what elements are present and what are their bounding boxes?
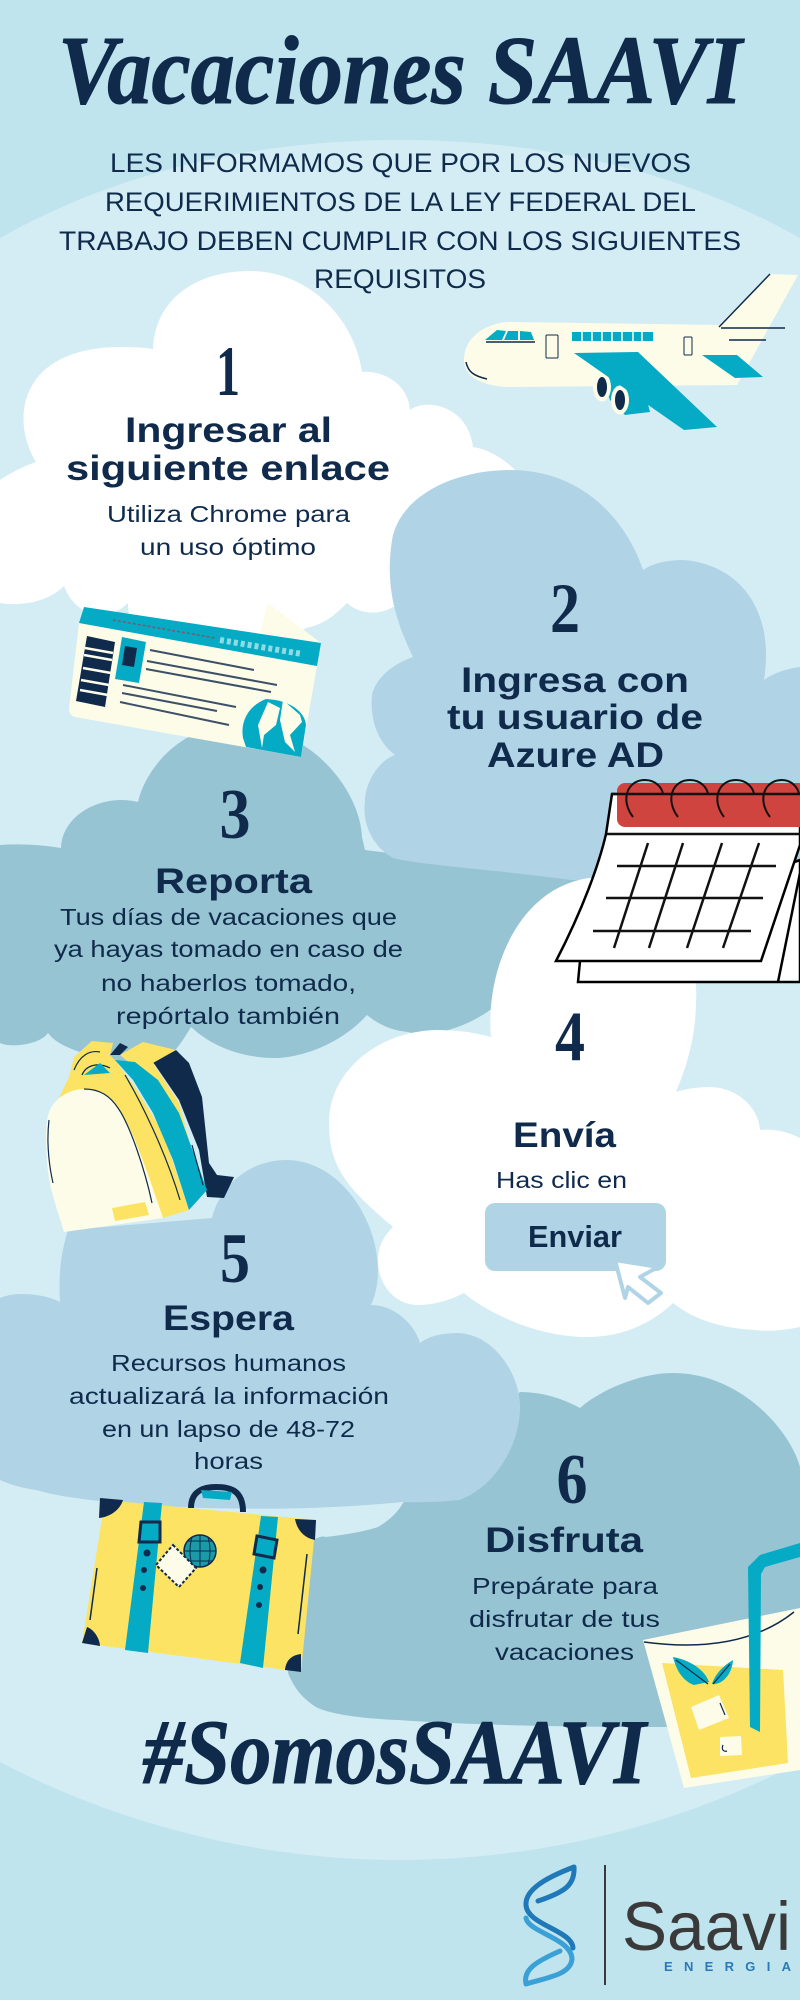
text: utiliza chrome: un uso óptimo <box>140 534 316 560</box>
cloud 6 <box>285 1373 800 1727</box>
divider <box>604 1865 606 1985</box>
heading: ingresa: tu usuario de <box>447 698 703 737</box>
intro text: TRABAJO DEBEN CUMPLIR CON LOS SIGUIENTES <box>59 226 741 256</box>
icon: airplane <box>464 274 798 430</box>
tagline: ENERGIA <box>664 1959 792 1974</box>
button: enviar <box>485 1203 666 1271</box>
text: prepárate <box>469 1573 660 1665</box>
intro text: REQUISITOS <box>314 264 486 294</box>
heading: ingresa: Ingresa con <box>461 661 689 700</box>
cloud 4 <box>329 877 800 1337</box>
text: tus días: Tus días de vacaciones que <box>60 904 397 930</box>
heading: ingresar <box>66 411 390 488</box>
text: tus días <box>54 904 403 1029</box>
wordmark: Saavi <box>622 1888 791 1965</box>
text: recursos humanos: actualizará la información <box>69 1383 389 1409</box>
cloud 3 <box>0 725 600 1065</box>
title: Vacaciones SAAVI <box>58 17 745 125</box>
heading: ingresa: Azure AD <box>487 736 664 775</box>
text: tus días: repórtalo también <box>116 1003 340 1029</box>
logo: saavi energia <box>526 1865 792 1985</box>
number 3: 3 <box>220 776 250 854</box>
icon: calendar <box>556 780 800 982</box>
number 6: 6 <box>556 1441 588 1519</box>
text: prepárate: Prepárate para <box>472 1573 659 1599</box>
panel: step 6 disfruta <box>285 1373 800 1727</box>
heading: reporta: Reporta <box>155 862 313 901</box>
text: tus días: ya hayas tomado en caso de <box>54 936 403 962</box>
text: has clic: Has clic en <box>496 1167 627 1193</box>
heading: ingresar: Ingresar al <box>125 411 332 450</box>
intro text: LES INFORMAMOS QUE POR LOS NUEVOS <box>110 148 691 178</box>
text: recursos humanos <box>69 1350 389 1474</box>
panel: step 3 reporta <box>0 725 600 1065</box>
icon: suitcase <box>82 1487 316 1672</box>
text: recursos humanos: en un lapso de 48-72 <box>102 1416 355 1442</box>
icon: helix <box>526 1867 574 1984</box>
heading: envía: Envía <box>513 1116 617 1155</box>
icon: boarding pass <box>69 603 321 757</box>
text: prepárate: vacaciones <box>495 1639 634 1665</box>
button: enviar: Enviar <box>528 1219 622 1254</box>
hashtag: #SomosSAAVI <box>142 1701 649 1803</box>
number 4: 4 <box>555 998 585 1076</box>
heading: espera: Espera <box>163 1299 295 1338</box>
panel: step 1 ingresar <box>0 271 530 650</box>
panel: step 5 espera <box>0 1160 520 1509</box>
intro text <box>59 148 741 294</box>
heading: ingresa <box>447 661 703 775</box>
icon: backpack <box>46 1041 234 1232</box>
text: utiliza chrome: Utiliza Chrome para <box>107 501 351 527</box>
cloud 2 <box>364 470 800 880</box>
number 1: 1 <box>216 333 240 411</box>
icon: cursor <box>615 1260 661 1303</box>
cloud 5 <box>0 1160 520 1509</box>
text: utiliza chrome <box>107 501 351 560</box>
panel: step 4 envía <box>329 877 800 1337</box>
number 5: 5 <box>220 1220 250 1298</box>
cloud 1 <box>0 271 530 650</box>
text: tus días: no haberlos tomado, <box>101 970 356 996</box>
text: recursos humanos: Recursos humanos <box>111 1350 346 1376</box>
heading: ingresar: siguiente enlace <box>66 449 390 488</box>
icon: drink <box>643 1543 800 1788</box>
number 2: 2 <box>550 570 580 648</box>
intro text: REQUERIMIENTOS DE LA LEY FEDERAL DEL <box>105 187 696 217</box>
text: prepárate: disfrutar de tus <box>469 1606 660 1632</box>
text: recursos humanos: horas <box>194 1448 263 1474</box>
heading: disfruta: Disfruta <box>485 1521 644 1560</box>
panel: step 2 ingresa <box>364 470 800 880</box>
